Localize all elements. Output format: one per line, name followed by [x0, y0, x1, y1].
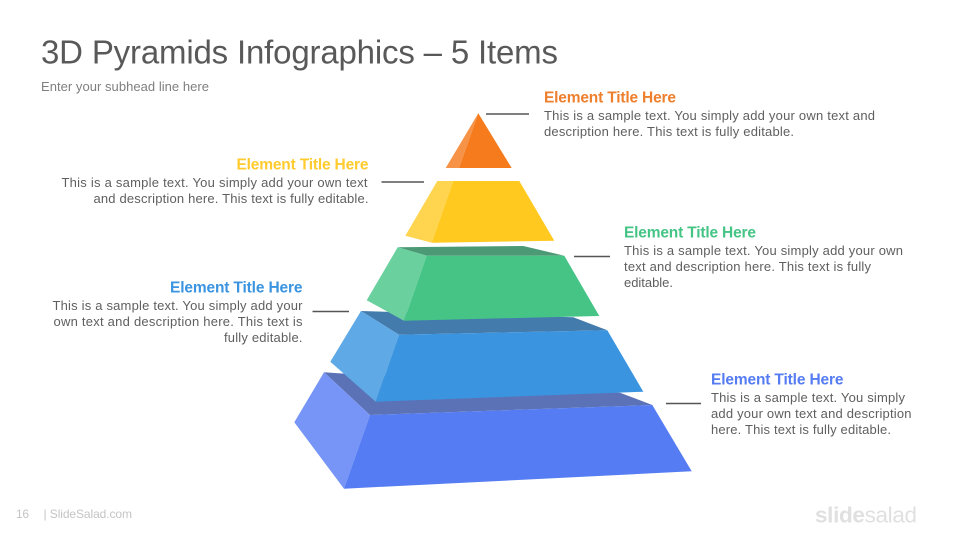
logo wordmark: slidesalad: [815, 502, 917, 528]
callout: orange element: description here. This text is fully editable.: [544, 124, 794, 139]
callout: orange element: Element Title Here: [544, 90, 676, 106]
callout: yellow element: [62, 156, 424, 206]
callout: orange element: This is a sample text. You simply add your own text and: [544, 108, 875, 123]
callout: indigo element: here. This text is fully editable.: [711, 422, 891, 437]
callout: indigo element: Element Title Here: [711, 372, 844, 388]
pyramid: [294, 113, 692, 489]
layer 3: green: [367, 246, 599, 321]
callout: indigo element: This is a sample text. You simply: [711, 390, 906, 405]
callout: orange element: [486, 90, 875, 139]
callout: blue element: [52, 280, 349, 345]
footer site name: | SlideSalad.com: [44, 507, 132, 521]
callout: green element: This is a sample text. You simply add your own: [624, 243, 903, 258]
callout: green element: editable.: [624, 275, 673, 290]
callout: indigo element: add your own text and description: [711, 406, 912, 421]
callout: yellow element: This is a sample text. You simply add your own text: [62, 175, 368, 190]
callout: green element: [574, 224, 903, 290]
callout: blue element: fully editable.: [224, 330, 302, 345]
layer 4: blue: [330, 311, 643, 402]
footer page number: 16: [16, 507, 29, 521]
callout: indigo element: [666, 372, 912, 437]
layer 5: indigo base: [294, 372, 692, 489]
subhead: Enter your subhead line here: [41, 79, 209, 94]
callout: blue element: This is a sample text. You simply add your: [52, 298, 303, 313]
callout: yellow element: and description here. This text is fully editable.: [94, 191, 368, 206]
callout: green element: Element Title Here: [624, 224, 756, 242]
callout: green element: text and description here. This text is fully: [624, 259, 872, 274]
callout: blue element: Element Title Here: [170, 280, 303, 296]
layer 2: yellow: [405, 181, 554, 243]
callout: yellow element: Element Title Here: [236, 156, 369, 174]
layer 1: orange apex: [446, 113, 512, 168]
title: 3D Pyramids Infographics – 5 Items: [41, 34, 558, 70]
callout: blue element: own text and description here. This text is: [54, 314, 303, 329]
